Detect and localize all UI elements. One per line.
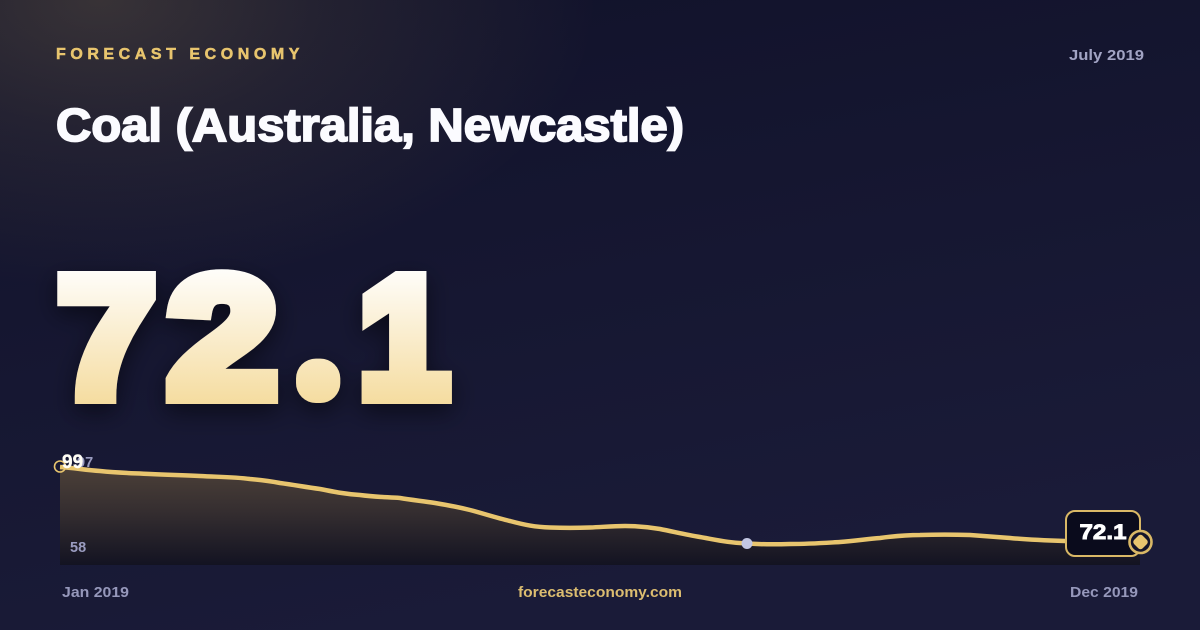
trend line xyxy=(60,467,1140,544)
area fill xyxy=(60,467,1140,565)
start marker xyxy=(54,461,66,472)
sparkline chart xyxy=(54,452,1152,565)
brand label: FORECAST ECONOMY xyxy=(56,46,304,63)
axis max label: 97 xyxy=(77,455,93,471)
big value xyxy=(58,242,449,433)
axis start date: Jan 2019 xyxy=(62,585,129,601)
end value badge: 72.1 xyxy=(1080,521,1127,544)
axis min label: 58 xyxy=(70,540,86,556)
low point marker xyxy=(742,538,752,549)
source url: forecasteconomy.com xyxy=(518,585,682,601)
big value: 7 xyxy=(58,242,155,432)
end value badge xyxy=(1066,511,1140,556)
end marker xyxy=(1130,531,1152,553)
title: Coal (Australia, Newcastle) xyxy=(56,99,684,151)
date label: July 2019 xyxy=(1069,47,1144,64)
axis end date: Dec 2019 xyxy=(1070,585,1138,601)
big value: . xyxy=(314,357,322,390)
big value: 2 xyxy=(168,242,277,432)
start value: 99 xyxy=(62,452,83,473)
big value: 1 xyxy=(359,243,449,433)
